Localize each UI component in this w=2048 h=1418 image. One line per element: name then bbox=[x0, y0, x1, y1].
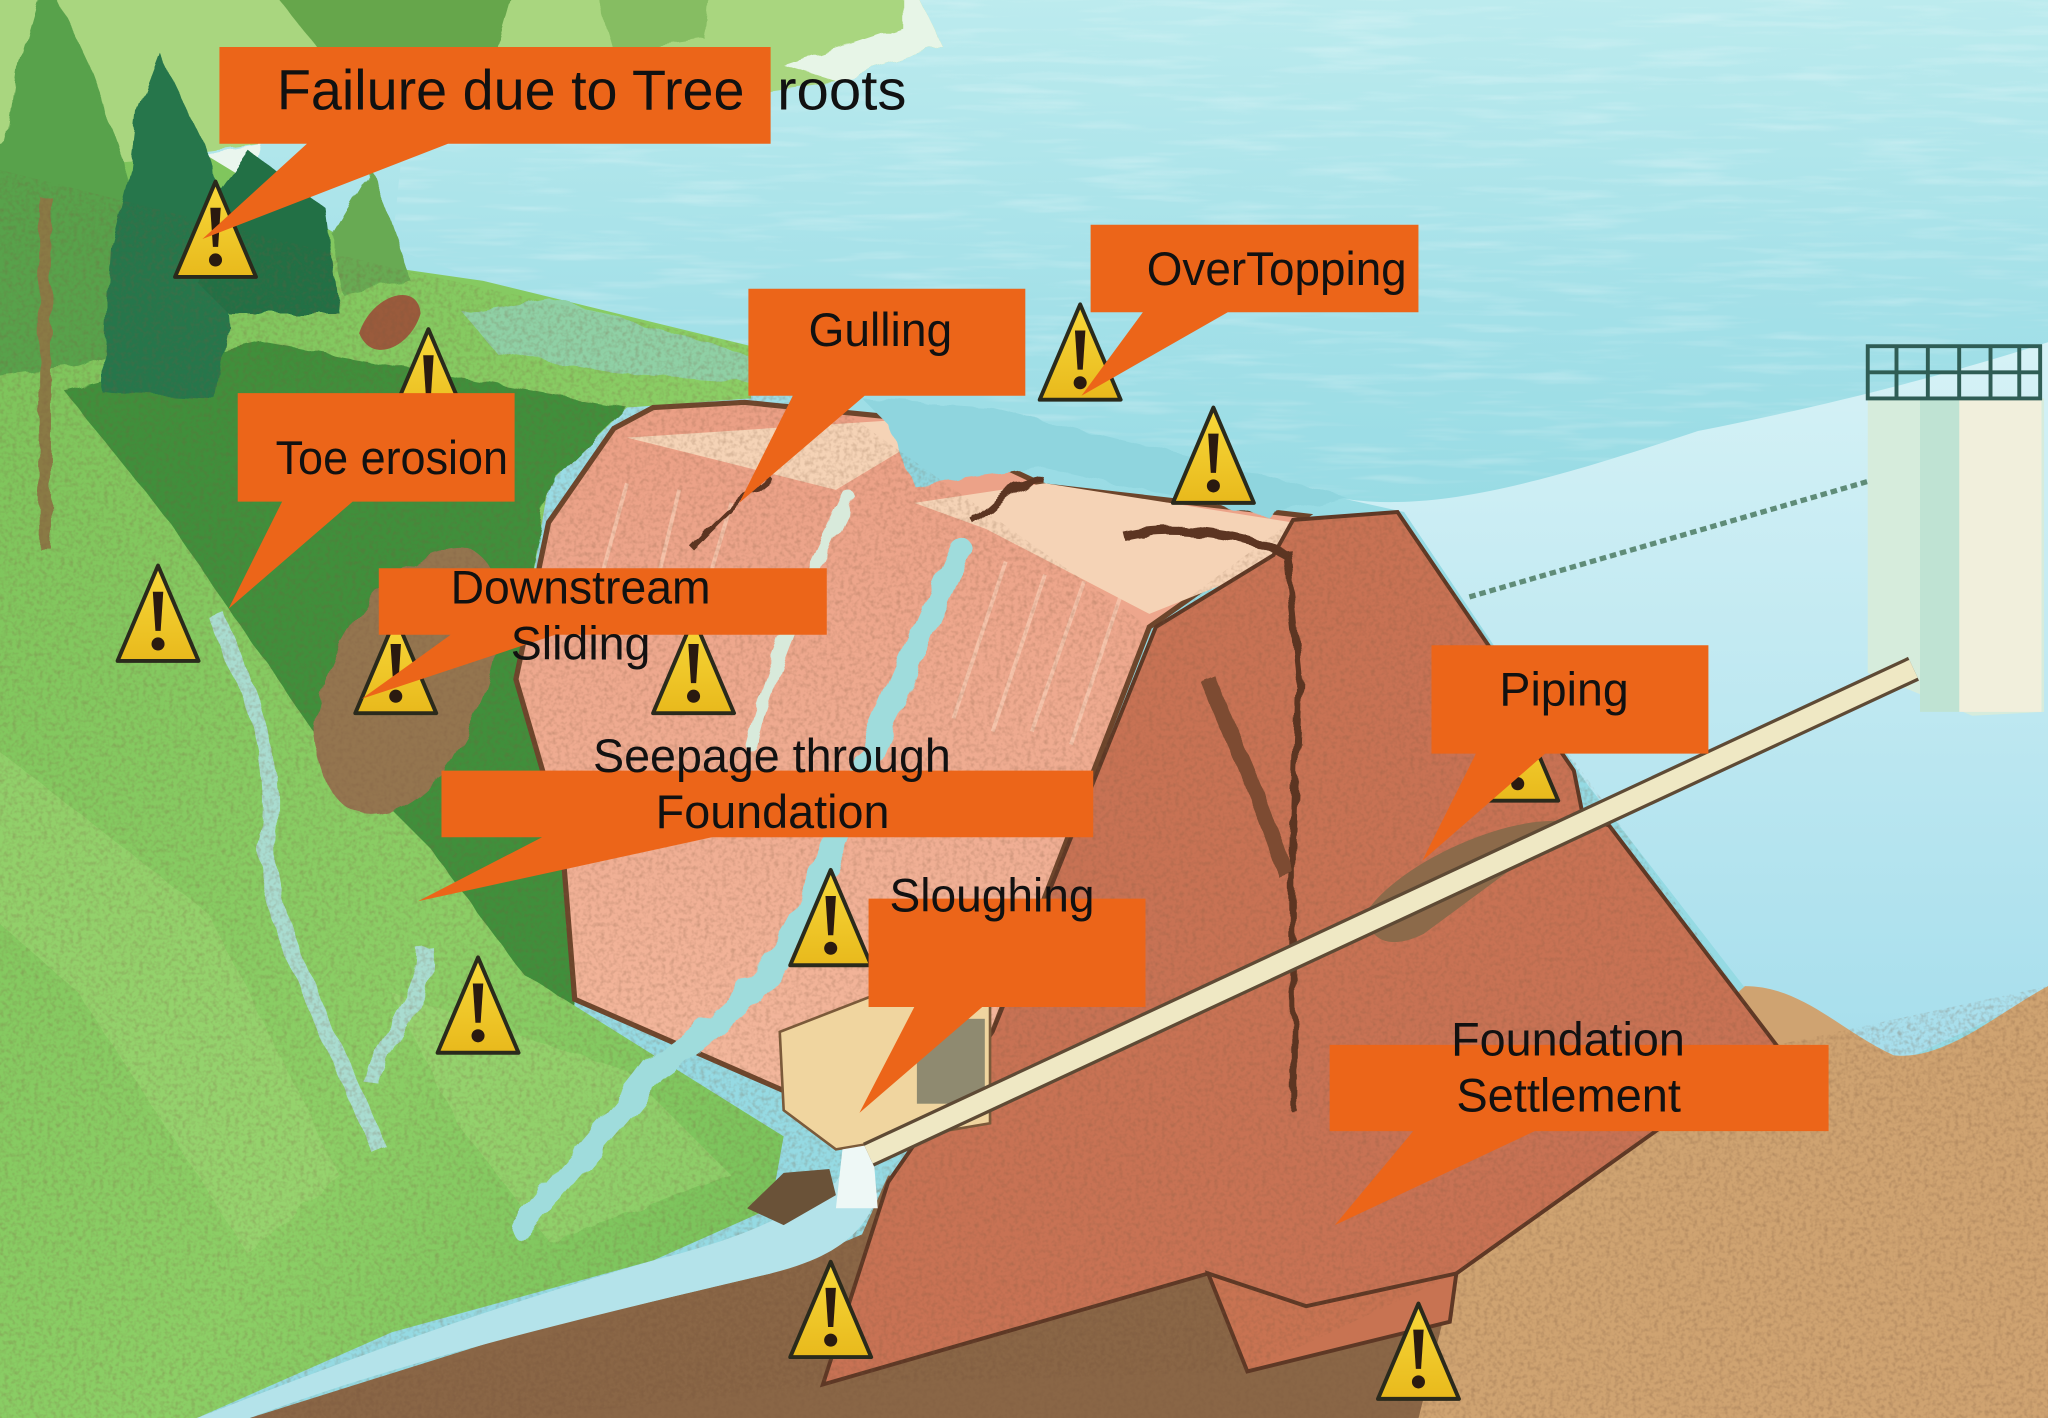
warning icon: downstream sliding bbox=[355, 618, 436, 713]
callout: gulling: Gulling bbox=[808, 303, 952, 356]
hillside grass bbox=[0, 157, 784, 1418]
warning icon: outlet bbox=[790, 1262, 871, 1357]
intake tower bbox=[1868, 346, 2044, 716]
callout: foundation settlement bbox=[1330, 1012, 1829, 1225]
warning icon: crest bbox=[1173, 408, 1254, 503]
callout: failure due to tree roots bbox=[202, 47, 906, 239]
grass light bands bbox=[0, 731, 731, 1254]
callout: toe erosion: Toe erosion bbox=[276, 431, 508, 484]
callout: seepage through foundation bbox=[418, 729, 1093, 901]
callout: failure due to tree roots: Failure due to Tree bbox=[277, 59, 744, 122]
callout: toe erosion bbox=[229, 393, 515, 609]
rocks beside outlet bbox=[747, 1169, 836, 1225]
warning icon: foundation settlement bbox=[1378, 1304, 1459, 1399]
dam downstream face bbox=[516, 402, 1306, 1091]
warning icon: toe erosion bbox=[118, 566, 199, 661]
outlet pipe bbox=[869, 669, 1913, 1155]
callout: foundation settlement: Settlement bbox=[1456, 1069, 1681, 1122]
sloughing scar bbox=[1365, 821, 1574, 942]
outlet waterfall bbox=[836, 1144, 878, 1208]
callout: seepage through foundation: Foundation bbox=[656, 785, 889, 838]
warning icon: piping bbox=[1477, 705, 1558, 801]
callout: sloughing: Sloughing bbox=[889, 869, 1095, 922]
warning icon: seepage through foundation bbox=[438, 957, 519, 1053]
callout: failure due to tree roots: roots bbox=[777, 59, 906, 122]
cut-away water behind dam bbox=[1345, 342, 2048, 1065]
downstream stream on hillside bbox=[216, 614, 425, 1149]
warning icon: tree roots bbox=[175, 182, 256, 277]
callout: seepage through foundation: Seepage through bbox=[593, 729, 951, 782]
soil foundation: dark left bbox=[248, 1176, 1489, 1418]
crack in cross section bbox=[692, 477, 1300, 1110]
callout: piping bbox=[1422, 645, 1708, 861]
foundation trench bbox=[1208, 1274, 1456, 1371]
warning icon: gulling bbox=[653, 618, 734, 713]
beaver burrow mound bbox=[359, 295, 421, 350]
callout: overtopping bbox=[1081, 225, 1418, 396]
dam cross section bbox=[823, 512, 1776, 1385]
reservoir notch at crest bbox=[862, 398, 1345, 516]
callout: downstream sliding: Downstream bbox=[451, 560, 711, 613]
far shore land bbox=[0, 0, 943, 196]
warning icon: overtopping bbox=[1040, 304, 1121, 400]
stream on dam face bbox=[522, 496, 960, 1228]
face stripes bbox=[588, 483, 1123, 745]
callout: foundation settlement: Foundation bbox=[1451, 1012, 1685, 1065]
sloughing block at outlet bbox=[780, 980, 990, 1149]
dashed guide line bbox=[1469, 481, 1870, 597]
warning icon: animal burrow bbox=[388, 329, 469, 425]
callout: downstream sliding: Sliding bbox=[511, 617, 650, 670]
callout: gulling bbox=[739, 289, 1025, 503]
callout: downstream sliding bbox=[362, 560, 827, 699]
warning icon: sloughing bbox=[790, 870, 871, 965]
trees bbox=[0, 0, 411, 549]
soil foundation: tan right bbox=[1417, 986, 2048, 1418]
far bank pond bbox=[464, 298, 751, 381]
downstream slide mass bbox=[313, 548, 501, 815]
shaded grass at dam toe bbox=[65, 342, 627, 1006]
dam crest bbox=[627, 421, 1293, 614]
callout: sloughing bbox=[859, 869, 1145, 1113]
outflow channel bbox=[196, 1149, 878, 1418]
callout: piping: Piping bbox=[1499, 662, 1629, 715]
callout: overtopping: OverTopping bbox=[1147, 242, 1407, 295]
